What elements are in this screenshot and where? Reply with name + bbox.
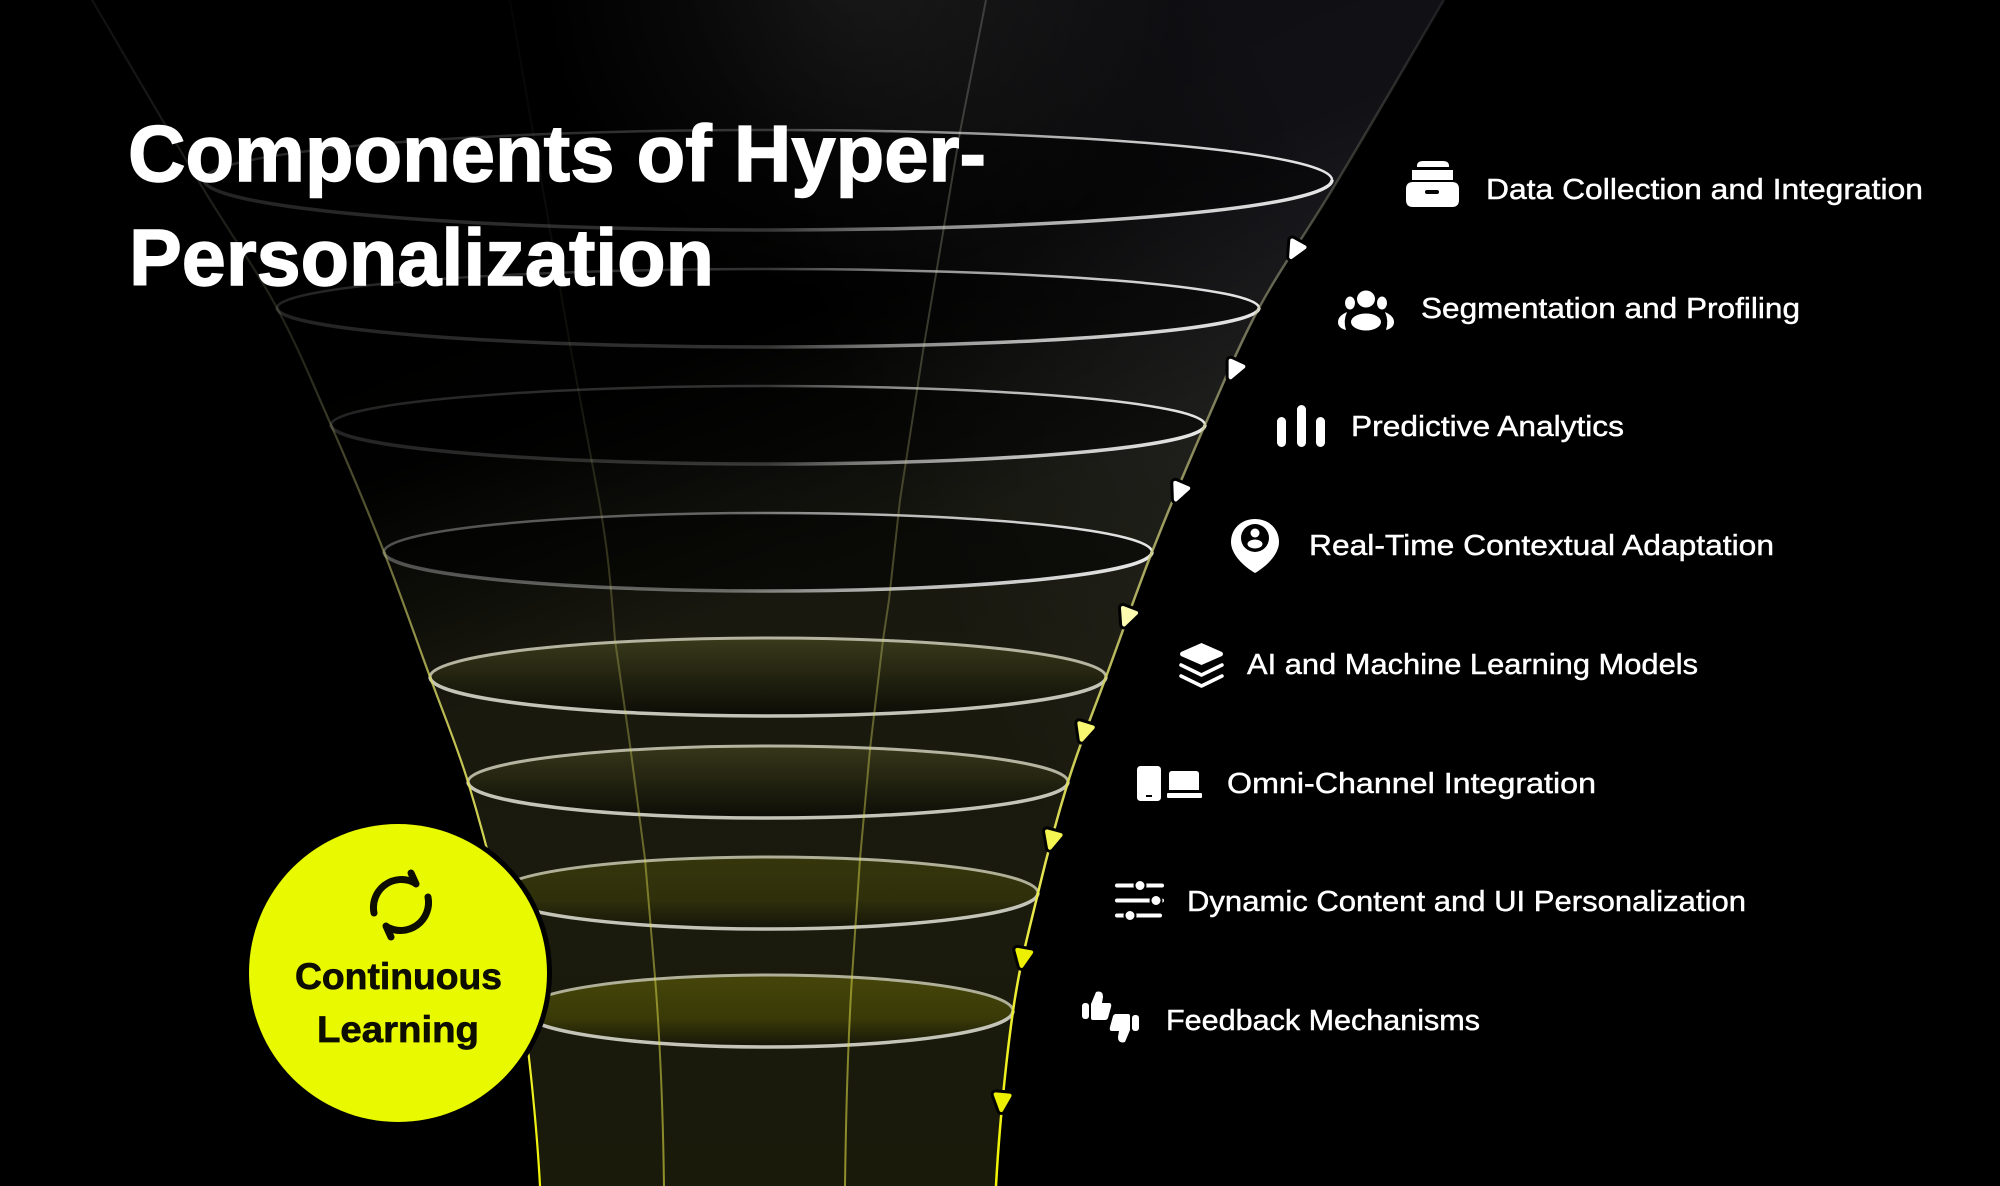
item: Segmentation and Profiling — [1338, 290, 1800, 330]
inner funnel lines — [510, 0, 986, 1186]
callout text — [295, 956, 502, 1050]
label: Segmentation and Profiling — [1421, 293, 1800, 325]
icon: stacked layers — [1180, 643, 1223, 686]
item: Predictive Analytics — [1277, 405, 1624, 447]
callout text: Continuous — [295, 956, 502, 997]
title: Components of Hyper- — [128, 109, 986, 198]
title: Personalization — [129, 213, 714, 302]
funnel outer edges — [92, 0, 1444, 1186]
label: Real-Time Contextual Adaptation — [1309, 530, 1774, 562]
label: Feedback Mechanisms — [1166, 1005, 1480, 1037]
ring 5 — [430, 638, 1106, 716]
component list — [1082, 161, 1923, 1042]
item: Omni-Channel Integration — [1137, 766, 1596, 801]
icon: location pin — [1231, 519, 1279, 573]
icon: refresh arrows — [373, 873, 429, 937]
callout text: Learning — [317, 1009, 479, 1050]
icon: archive box — [1406, 161, 1459, 207]
ring 6 — [468, 746, 1068, 818]
ring 2 — [277, 269, 1259, 347]
ring 3 — [331, 386, 1205, 464]
flow arrowheads — [994, 240, 1305, 1111]
icon: sliders — [1115, 880, 1164, 921]
label: Data Collection and Integration — [1486, 174, 1923, 206]
icon: bar chart — [1277, 405, 1325, 447]
title — [128, 109, 986, 302]
item: Feedback Mechanisms — [1082, 992, 1480, 1042]
icon: phone and laptop — [1137, 766, 1202, 801]
funnel body — [92, 0, 1444, 1186]
label: Omni-Channel Integration — [1227, 768, 1596, 800]
callout: Continuous Learning — [249, 824, 547, 1122]
icon: thumbs up and down — [1082, 992, 1139, 1042]
item: AI and Machine Learning Models — [1180, 643, 1698, 686]
funnel diagram — [92, 0, 1444, 1186]
item: Dynamic Content and UI Personalization — [1115, 880, 1746, 921]
label: Predictive Analytics — [1351, 411, 1624, 443]
label: AI and Machine Learning Models — [1247, 649, 1698, 681]
item: Data Collection and Integration — [1406, 161, 1923, 207]
ring 4 — [384, 513, 1152, 591]
ring 7 — [498, 857, 1038, 929]
item: Real-Time Contextual Adaptation — [1231, 519, 1774, 573]
ring 1 — [204, 130, 1332, 230]
ring 8 — [523, 975, 1013, 1047]
label: Dynamic Content and UI Personalization — [1187, 886, 1746, 918]
icon: people group — [1338, 290, 1394, 330]
